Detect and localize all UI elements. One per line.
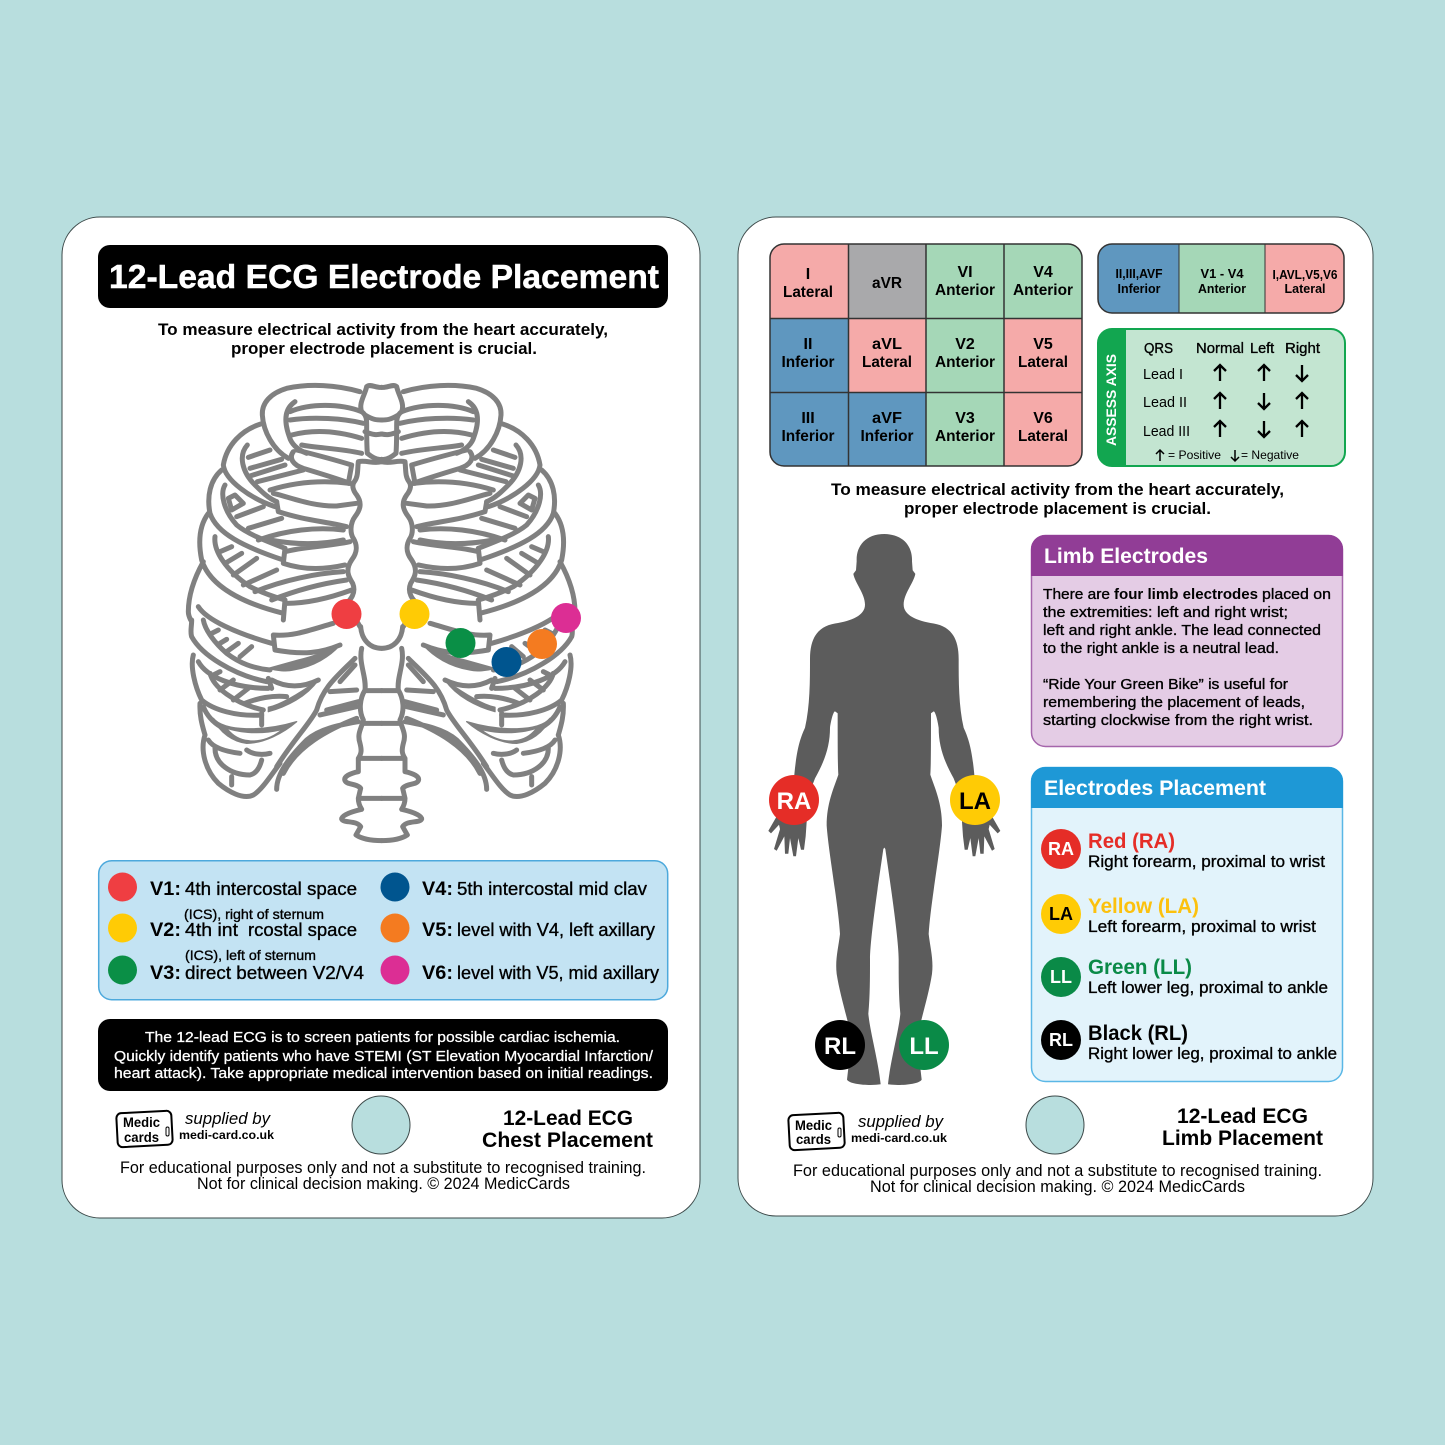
table cell labels: V5: [1033, 336, 1053, 353]
table cell labels: aVF: [872, 410, 902, 427]
electrode: RA: [769, 775, 819, 825]
card name: Limb Placement: [1162, 1127, 1323, 1150]
item: red RA: Right forearm, proximal to wrist: [1088, 852, 1325, 871]
chart: body silhouette with limb electrodes: [768, 534, 1000, 1085]
legend: V4: 5th intercostal mid clav: [457, 879, 647, 899]
intro text: To measure electrical activity from the heart accurately,: [831, 480, 1284, 499]
electrode: LA: [950, 775, 1000, 825]
legend: V5: level with V4, left axillary: [457, 920, 655, 940]
logo: Medic cards supplied by: Medic: [123, 1114, 160, 1130]
legend: V4: [380, 872, 647, 902]
logo: Medic cards supplied by: cards: [124, 1129, 159, 1145]
table: leads by territory: [770, 244, 1082, 466]
legend: V4: V4:: [422, 879, 453, 900]
item: red RA: RA: [1048, 839, 1074, 859]
body text: “Ride Your Green Bike” is useful for: [1043, 676, 1288, 693]
intro text: To measure electrical activity from the heart accurately,: [158, 320, 608, 339]
title: 12-Lead ECG Electrode Placement: [109, 258, 659, 295]
logo: Medic cards supplied by: Medic: [795, 1117, 832, 1133]
legend: V3: [108, 956, 364, 984]
body text: placed on: [1262, 586, 1331, 603]
legend: V2: [108, 914, 357, 963]
body text: left and right ankle. The lead connected: [1043, 622, 1321, 639]
logo: Medic cards supplied by: supplied by: [185, 1109, 271, 1128]
logo: Medic cards supplied by: cards: [796, 1131, 831, 1147]
card name: 12-Lead ECG: [503, 1107, 633, 1130]
item: black RL: [1041, 1020, 1337, 1063]
intro text: [831, 480, 1284, 518]
axis table headers: Normal: [1196, 341, 1244, 357]
panel: chest placement card: [62, 217, 700, 1218]
table: territory summary: Inferior: [1118, 281, 1160, 296]
item: yellow LA: [1041, 894, 1316, 936]
axis table headers: Lead II: [1143, 395, 1187, 411]
panel: chest lead legend: [99, 861, 668, 1000]
intro text: [158, 320, 608, 358]
logo: Medic cards supplied by: [788, 1112, 947, 1150]
logo: Medic cards supplied by: medi-card.co.uk: [179, 1128, 274, 1142]
table cell labels: VI: [957, 264, 973, 281]
item: green LL: LL: [1050, 967, 1072, 987]
axis table headers: Left: [1250, 341, 1274, 357]
axis table headers: Right: [1285, 341, 1320, 357]
electrode: LL: [899, 1020, 949, 1070]
disclaimer: For educational purposes only and not a substitute to recognised training.: [120, 1159, 646, 1177]
body text: [1043, 586, 1331, 729]
intro text: proper electrode placement is crucial.: [231, 339, 537, 358]
table: territory summary: Lateral: [1284, 281, 1326, 296]
item: yellow LA: Left forearm, proximal to wrist: [1088, 917, 1316, 936]
legend: V1: [108, 872, 357, 922]
vertical label: ASSESS AXIS: [1103, 354, 1119, 446]
punched hole: [1026, 1096, 1084, 1154]
callout: purpose of the 12-lead ECG: heart attack). Take appropriate medical intervention based on initial readings.: [114, 1065, 653, 1082]
table cell labels: II: [804, 336, 812, 353]
table cell labels: Anterior: [935, 354, 995, 371]
table cell labels: Inferior: [860, 428, 914, 445]
body text: to the right ankle is a neutral lead.: [1043, 640, 1279, 657]
legend: V6: V6:: [422, 963, 453, 984]
table cell labels: Lateral: [862, 354, 912, 371]
chart: ribcage with chest electrodes: [188, 385, 581, 841]
electrode: RA: RA: [777, 788, 811, 815]
electrode: LA: LA: [959, 788, 991, 815]
panel: assess axis: [1098, 329, 1345, 466]
callout: purpose of the 12-lead ECG: Quickly identify patients who have STEMI (ST Elevation Myocardial Infarction/: [114, 1048, 654, 1065]
title: [98, 245, 668, 308]
electrode: LL: LL: [909, 1033, 939, 1060]
arrow key: = Positive: [1168, 448, 1221, 462]
table cell labels: I: [806, 266, 810, 283]
item: black RL: RL: [1049, 1030, 1073, 1050]
panel heading: Electrodes Placement: [1044, 777, 1266, 800]
item: yellow LA: LA: [1049, 904, 1073, 924]
illustration: human silhouette: [768, 534, 1000, 1085]
panel heading: [1031, 535, 1343, 576]
table: territory summary: [1098, 244, 1344, 313]
table cell labels: Lateral: [1018, 354, 1068, 371]
punched hole: [352, 1096, 410, 1154]
panel: limb electrodes: [1031, 535, 1343, 746]
disclaimer: For educational purposes only and not a substitute to recognised training.: [793, 1162, 1322, 1180]
legend: V5: V5:: [422, 920, 453, 941]
body text: the extremities: left and right wrist;: [1043, 604, 1288, 621]
table cell labels: Inferior: [782, 428, 834, 445]
electrode: RL: [815, 1020, 865, 1070]
table cell labels: V4: [1033, 264, 1053, 281]
legend: V2: V2:: [150, 920, 181, 941]
disclaimer: Not for clinical decision making. © 2024 MedicCards: [197, 1175, 570, 1193]
table cell labels: III: [801, 410, 815, 427]
legend: V1: V1:: [150, 879, 181, 900]
logo: Medic cards supplied by: supplied by: [858, 1112, 944, 1131]
electrode: RL: RL: [824, 1033, 856, 1060]
table cell labels: V2: [955, 336, 975, 353]
panel: electrodes placement: [1031, 767, 1343, 1082]
item: yellow LA: Yellow (LA): [1088, 895, 1199, 918]
table cell labels: [782, 264, 1073, 445]
table cell labels: Lateral: [783, 284, 833, 301]
card name: [482, 1107, 653, 1152]
table cell labels: Inferior: [782, 354, 834, 371]
arrows: axis deviation: [1214, 365, 1308, 437]
illustration: ribcage: [188, 385, 575, 841]
legend: V5: [380, 914, 655, 942]
item: black RL: Black (RL): [1088, 1022, 1188, 1045]
axis table headers: [1143, 341, 1320, 440]
table cell labels: Lateral: [1018, 428, 1068, 445]
panel heading: [1031, 767, 1343, 808]
table cell labels: aVL: [872, 336, 902, 353]
body text: There are: [1043, 586, 1110, 603]
table: territory summary: II,III,AVF: [1116, 266, 1163, 281]
callout: purpose of the 12-lead ECG: The 12-lead ECG is to screen patients for possible cardiac ischemia.: [145, 1029, 620, 1046]
intro text: proper electrode placement is crucial.: [904, 499, 1211, 518]
legend: V6: level with V5, mid axillary: [457, 963, 659, 983]
callout: purpose of the 12-lead ECG: [98, 1019, 668, 1091]
disclaimer: Not for clinical decision making. © 2024 MedicCards: [870, 1178, 1245, 1196]
body text: four limb electrodes: [1114, 586, 1258, 603]
panel: limb placement card: [738, 217, 1373, 1216]
table cell labels: Anterior: [935, 282, 995, 299]
item: green LL: [1041, 956, 1328, 997]
disclaimer: [120, 1159, 646, 1193]
arrow key: [1156, 448, 1299, 462]
legend: V1: 4th intercostal space: [185, 879, 357, 899]
item: green LL: Left lower leg, proximal to ankle: [1088, 978, 1328, 997]
card name: 12-Lead ECG: [1177, 1105, 1308, 1128]
card name: [1162, 1105, 1323, 1150]
body text: remembering the placement of leads,: [1043, 694, 1305, 711]
legend: V1: (ICS), right of sternum: [184, 906, 324, 922]
item: red RA: [1041, 829, 1325, 871]
body text: starting clockwise from the right wrist.: [1043, 712, 1313, 729]
table: territory summary: I,AVL,V5,V6: [1272, 267, 1338, 282]
disclaimer: [793, 1162, 1322, 1196]
card name: Chest Placement: [482, 1129, 653, 1152]
item: green LL: Green (LL): [1088, 956, 1192, 979]
table cell labels: aVR: [872, 275, 902, 292]
item: black RL: Right lower leg, proximal to ankle: [1088, 1044, 1337, 1063]
panel heading: Limb Electrodes: [1044, 545, 1208, 568]
legend: V6: [380, 956, 659, 984]
item: red RA: Red (RA): [1088, 830, 1175, 853]
axis table headers: Lead III: [1143, 424, 1190, 440]
legend: V2: (ICS), left of sternum: [185, 947, 316, 963]
axis table headers: Lead I: [1143, 367, 1183, 383]
logo: Medic cards supplied by: medi-card.co.uk: [851, 1131, 947, 1145]
legend: V2: 4th int: [185, 920, 238, 940]
table cell labels: Anterior: [1013, 282, 1073, 299]
axis table headers: QRS: [1144, 341, 1173, 357]
table: territory summary: V1 - V4: [1200, 266, 1244, 281]
table cell labels: Anterior: [935, 428, 995, 445]
legend: V2: rcostal space: [248, 920, 357, 940]
electrode markers V1 to V6: [332, 599, 581, 677]
table: territory summary: Anterior: [1198, 281, 1246, 296]
legend: V3: direct between V2/V4: [185, 963, 364, 983]
legend: V3: V3:: [150, 963, 181, 984]
arrow key: = Negative: [1241, 448, 1299, 462]
logo: Medic cards supplied by: [116, 1109, 274, 1147]
table cell labels: V6: [1033, 410, 1053, 427]
table cell labels: V3: [955, 410, 975, 427]
